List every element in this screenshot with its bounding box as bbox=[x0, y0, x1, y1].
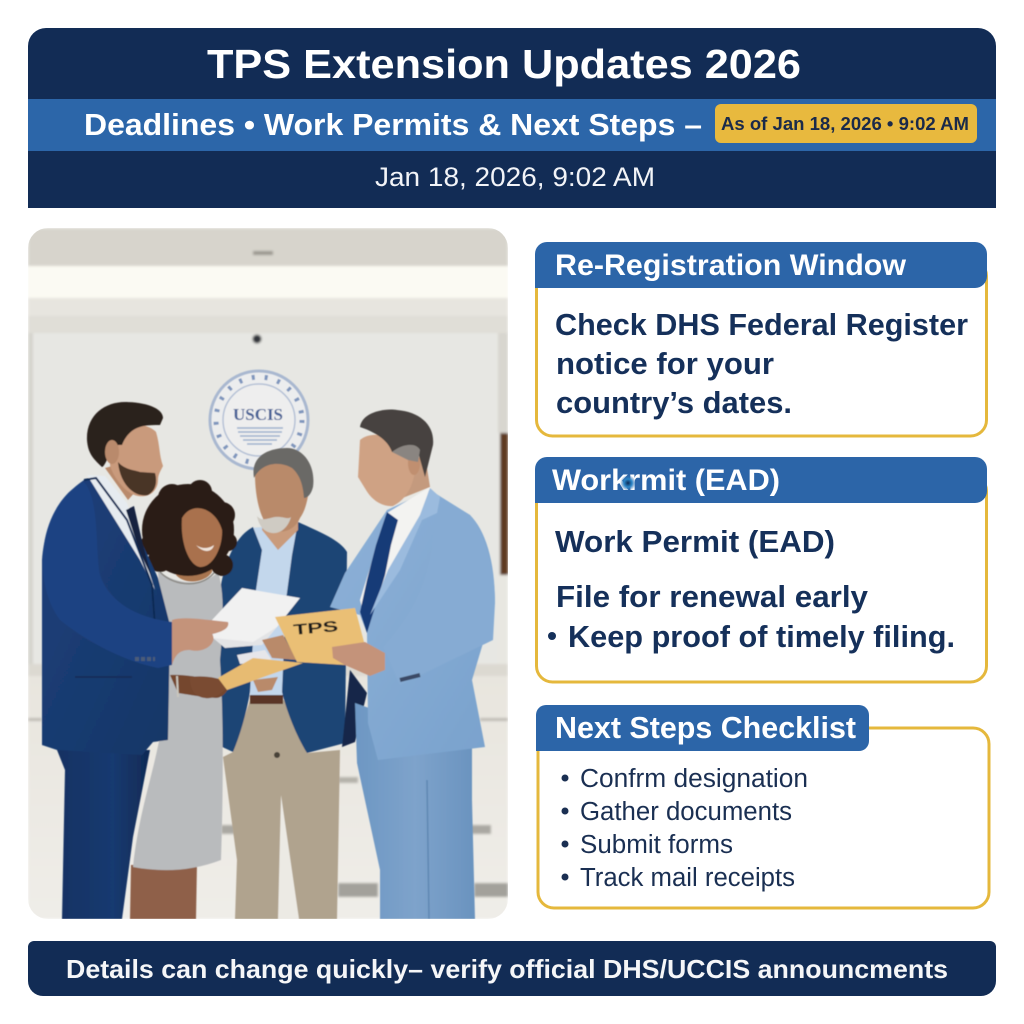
card header bbox=[535, 242, 987, 288]
USCIS wall seal: USCIS bbox=[233, 405, 283, 424]
hand: woman bbox=[196, 676, 220, 699]
person: left man in navy suit bbox=[42, 402, 172, 919]
card header bbox=[535, 457, 987, 503]
checklist: Confrm designation bbox=[580, 765, 808, 793]
card subheading: Work Permit (EAD) bbox=[555, 524, 835, 559]
hand: center man bbox=[253, 635, 297, 692]
checklist bbox=[562, 765, 808, 892]
manila envelope labelled TPS bbox=[275, 608, 364, 665]
card body text: notice for your bbox=[556, 346, 774, 381]
card body text: Check DHS Federal Register bbox=[555, 307, 968, 342]
checklist: Gather documents bbox=[580, 798, 792, 826]
title: TPS Extension Updates 2026 bbox=[207, 41, 801, 87]
person: right man in light blue suit bbox=[330, 410, 495, 919]
hand: right man bbox=[332, 642, 385, 676]
hand: left man bbox=[172, 618, 228, 665]
card body text bbox=[548, 579, 955, 654]
card header: Next Steps Checklist bbox=[555, 710, 856, 745]
manila envelope: lower bbox=[218, 658, 303, 690]
card header: Workrmit (EAD) bbox=[552, 464, 780, 497]
manila envelope labelled TPS: TPS bbox=[293, 618, 339, 639]
USCIS wall seal bbox=[210, 371, 308, 469]
footer banner: Details can change quickly– verify official DHS/UCCIS announcments bbox=[66, 954, 948, 984]
checklist: Submit forms bbox=[580, 831, 733, 859]
header banner bbox=[28, 28, 996, 208]
subtitle strip bbox=[28, 99, 996, 151]
card header: Re-Registration Window bbox=[555, 249, 907, 282]
person: center man in navy blazer and khaki trousers bbox=[218, 448, 367, 919]
panel: photo of four people reviewing TPS documents bbox=[28, 228, 508, 919]
panel: Re-Registration Window bbox=[535, 242, 987, 436]
footer banner bbox=[28, 941, 996, 996]
date badge: As of Jan 18, 2026 • 9:02 AM bbox=[721, 114, 969, 134]
card body text bbox=[555, 307, 968, 420]
card body text: File for renewal early bbox=[556, 579, 869, 614]
subtitle: Deadlines • Work Permits & Next Steps – bbox=[84, 107, 702, 142]
checklist: Track mail receipts bbox=[580, 864, 795, 892]
panel: Next Steps Checklist bbox=[536, 705, 989, 908]
people group bbox=[42, 402, 495, 919]
date line: Jan 18, 2026, 9:02 AM bbox=[375, 162, 655, 192]
date badge bbox=[715, 104, 977, 143]
office background bbox=[28, 228, 508, 919]
person: woman in grey dress with curly hair bbox=[130, 480, 237, 919]
panel: Work Permit (EAD) bbox=[535, 457, 987, 682]
white papers bbox=[212, 588, 300, 664]
card body text: Keep proof of timely filing. bbox=[568, 619, 955, 654]
card body text: country’s dates. bbox=[556, 385, 792, 420]
